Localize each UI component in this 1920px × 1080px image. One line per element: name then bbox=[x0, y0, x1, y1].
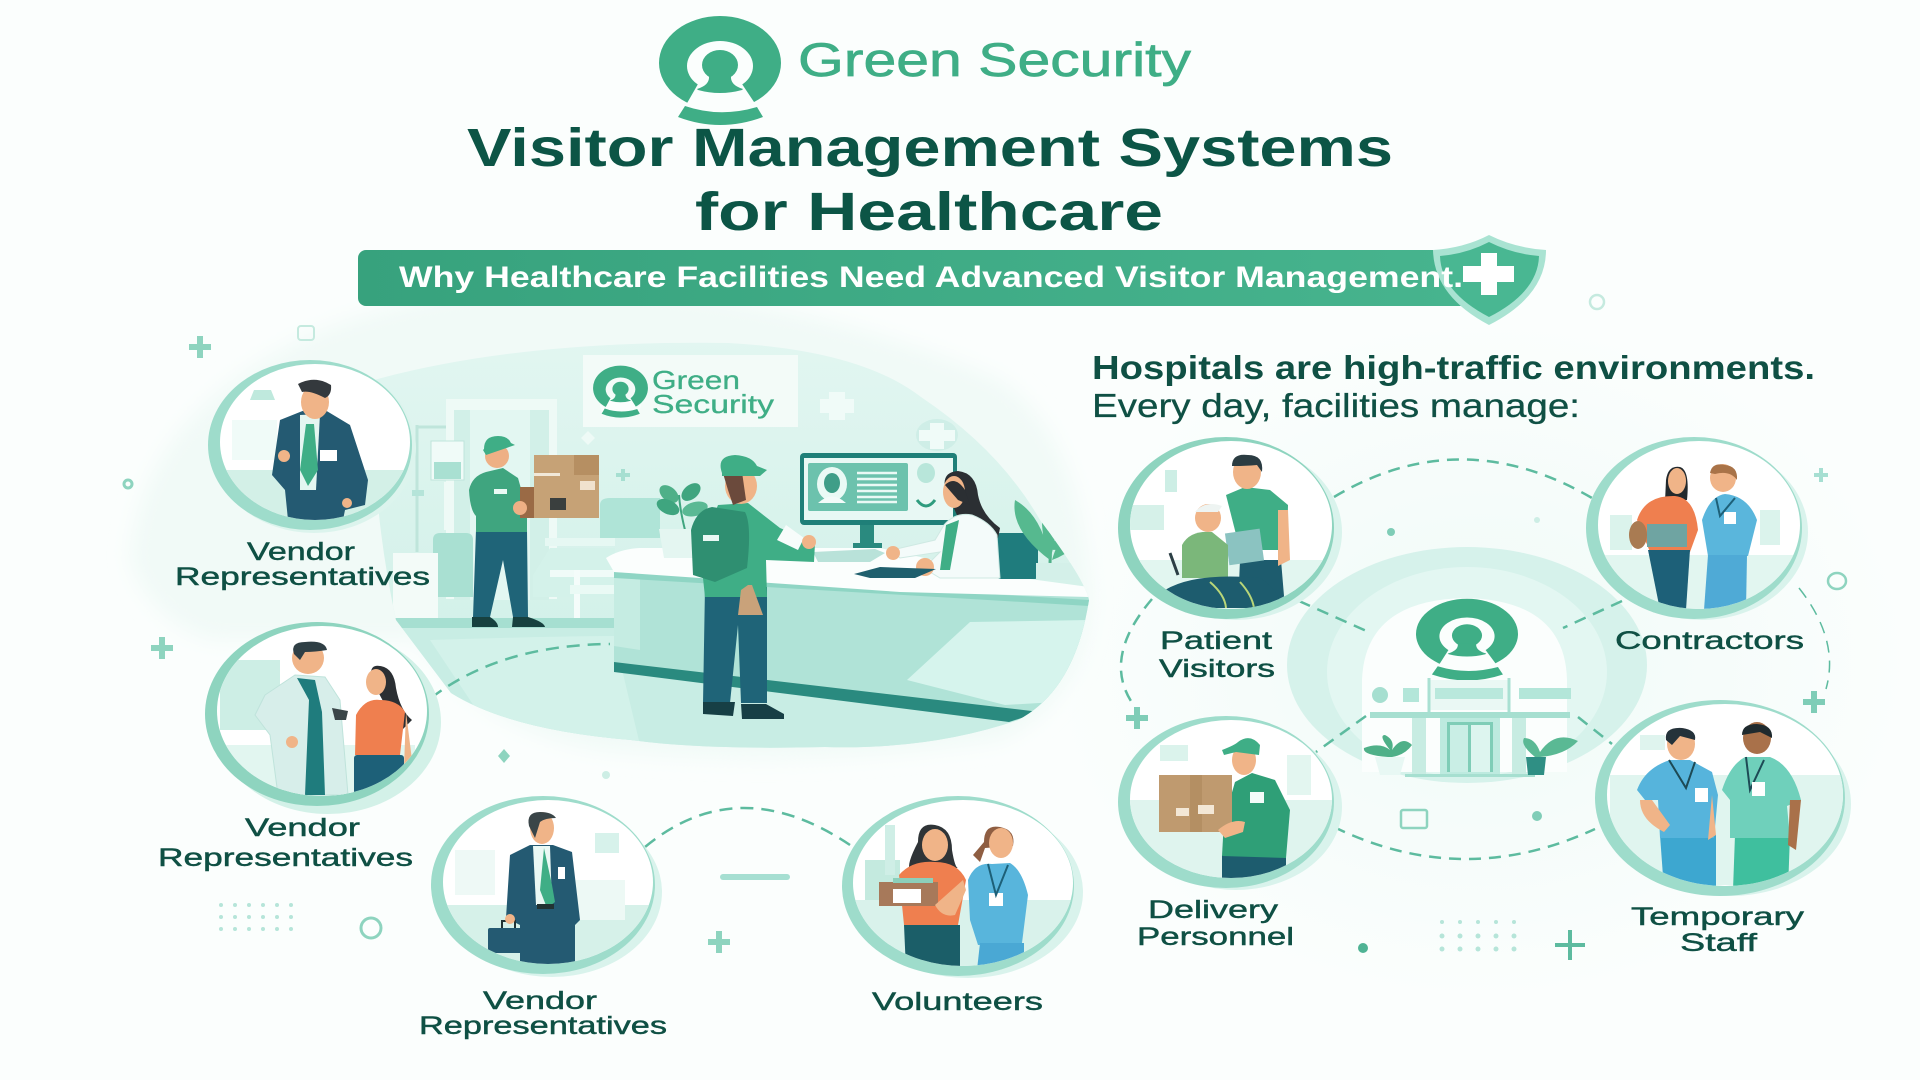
icon: center logo bbox=[1416, 599, 1518, 680]
connector: left dashed bbox=[431, 644, 610, 698]
icon: sign logo bbox=[593, 366, 648, 418]
decorative rings right bbox=[1401, 295, 1846, 828]
label: vendor representatives 3 bbox=[419, 987, 667, 1040]
label: temporary staff bbox=[1631, 903, 1805, 957]
keyboard bbox=[813, 549, 885, 562]
label: vendor representatives 3: Vendor bbox=[483, 987, 597, 1015]
building bbox=[1370, 678, 1571, 777]
floor bbox=[402, 628, 1020, 748]
icon: medical shield bbox=[1433, 235, 1546, 325]
delivery worker with box bbox=[469, 436, 599, 627]
circle: volunteers bbox=[842, 796, 1083, 978]
title bbox=[467, 118, 1393, 242]
heading: right column: Hospitals are high-traffic environments. bbox=[1092, 349, 1815, 386]
plant on desk bbox=[656, 483, 708, 558]
label: vendor representatives 2: Representatives bbox=[158, 844, 413, 872]
label: patient visitors: Visitors bbox=[1159, 655, 1275, 683]
label: vendor representatives 1: Representatives bbox=[175, 563, 430, 591]
circle: delivery personnel bbox=[1118, 716, 1342, 890]
monitor bbox=[800, 453, 957, 548]
circle: patient visitors bbox=[1118, 437, 1342, 620]
panel: left background blob bbox=[130, 285, 1090, 758]
decorative shapes right bbox=[1126, 468, 1828, 960]
dot grid right bbox=[1440, 920, 1516, 952]
label: vendor representatives 1 bbox=[175, 538, 430, 591]
label: temporary staff: Temporary bbox=[1631, 903, 1805, 931]
banner text: Why Healthcare Facilities Need Advanced Visitor Management. bbox=[399, 261, 1463, 294]
label: delivery personnel: Personnel bbox=[1137, 923, 1294, 951]
circle: temporary staff bbox=[1595, 700, 1851, 896]
panel: reception scene bbox=[360, 335, 1100, 760]
sign: Green Security bbox=[583, 355, 798, 427]
sign text bbox=[653, 370, 774, 419]
center: hospital hub bbox=[1287, 547, 1647, 783]
title: for Healthcare bbox=[695, 182, 1163, 242]
brand name: Green Security bbox=[798, 33, 1192, 86]
label: vendor representatives 1: Vendor bbox=[247, 538, 355, 566]
sign text: Security bbox=[652, 389, 774, 419]
waiting furniture bbox=[393, 498, 660, 625]
tablet on desk bbox=[854, 567, 936, 578]
label: vendor representatives 3: Representatives bbox=[419, 1012, 667, 1040]
title: Visitor Management Systems bbox=[467, 118, 1393, 178]
connectors: dashed network right bbox=[1121, 459, 1830, 859]
circle: vendor representative 1 bbox=[208, 360, 416, 533]
IV pole bbox=[412, 425, 464, 552]
banner: subtitle bbox=[358, 235, 1546, 325]
heading: right column bbox=[1092, 349, 1815, 424]
connector: bottom left dashed bbox=[645, 808, 850, 847]
icon: wall calendar bbox=[1004, 427, 1057, 468]
reception desk bbox=[606, 548, 1090, 722]
circle: contractors bbox=[1586, 437, 1808, 620]
circle: vendor representative 3 briefcase bbox=[431, 796, 662, 977]
label: vendor representatives 2: Vendor bbox=[245, 814, 360, 842]
circle: vendor representative 2 doctor bbox=[205, 622, 441, 814]
sign text: Green bbox=[652, 365, 740, 395]
heading: right column: Every day, facilities manage: bbox=[1092, 387, 1580, 424]
decorative shapes left bbox=[151, 336, 790, 953]
label: delivery personnel: Delivery bbox=[1148, 896, 1279, 924]
label: volunteers: Volunteers bbox=[872, 988, 1043, 1016]
dot grid left bbox=[219, 903, 293, 931]
decorative rings left bbox=[124, 326, 381, 938]
doorway bbox=[446, 399, 557, 600]
icon: shield logo mark bbox=[659, 16, 781, 125]
label: patient visitors: Patient bbox=[1160, 627, 1272, 655]
label: temporary staff: Staff bbox=[1680, 929, 1757, 957]
logo: Green Security brand bbox=[659, 16, 1192, 125]
label: delivery personnel bbox=[1137, 896, 1294, 951]
receptionist bbox=[886, 471, 1038, 579]
label: contractors: Contractors bbox=[1615, 627, 1804, 655]
plants bbox=[1364, 735, 1578, 775]
label: vendor representatives 2 bbox=[158, 814, 413, 872]
icon: plus wall decor bbox=[581, 392, 958, 481]
label: patient visitors bbox=[1159, 627, 1275, 683]
right plant bbox=[1014, 500, 1064, 580]
visitor at desk bbox=[691, 455, 816, 719]
